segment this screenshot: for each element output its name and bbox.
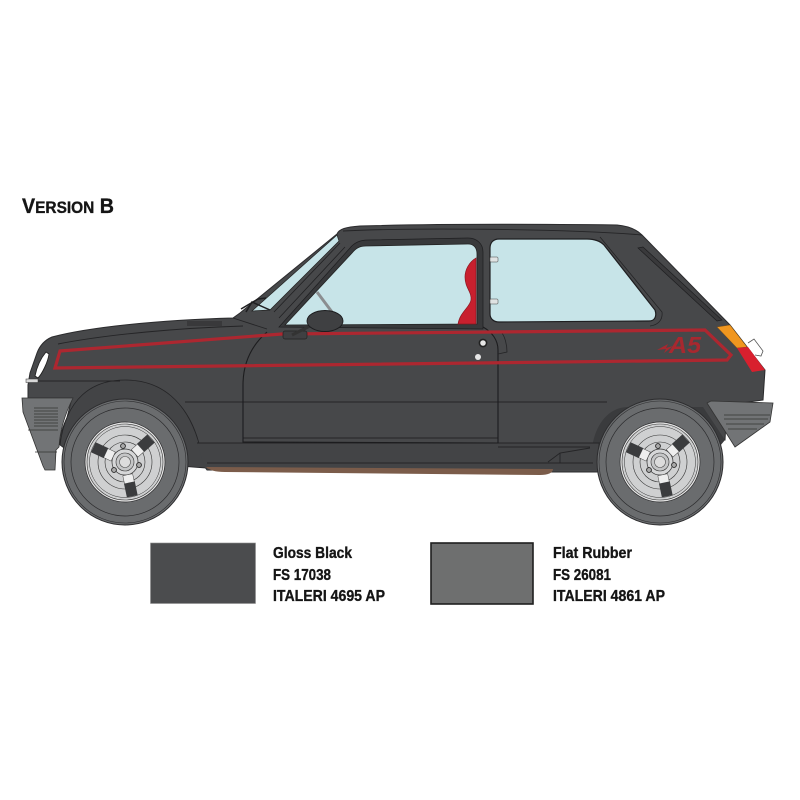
- body panel lines: [28, 229, 642, 463]
- car illustration: [22, 224, 773, 525]
- bonnet vent: [187, 321, 222, 326]
- car body: [28, 224, 765, 472]
- rocker sill: [197, 443, 598, 470]
- tail light amber: [717, 325, 747, 348]
- wiper: [241, 298, 270, 312]
- label: Gloss Black: ITALERI 4695 AP: [273, 588, 385, 605]
- door handle recess: [493, 332, 507, 354]
- door buttons: [475, 339, 487, 360]
- A pillar mirror stalk: [317, 292, 332, 312]
- swatch: Gloss Black: [150, 543, 256, 604]
- front side window glass: [285, 244, 477, 325]
- red side stripe: [55, 330, 731, 368]
- label: Flat Rubber: [553, 545, 665, 605]
- front bumper vents: [28, 408, 58, 452]
- window frame: front: [279, 238, 483, 329]
- heading: Version B: VERSION B: [22, 195, 114, 218]
- front bumper: [22, 398, 73, 470]
- brown underbody strip: [206, 467, 553, 475]
- label: Gloss Black: [273, 545, 385, 605]
- rear window surround: [600, 237, 662, 326]
- A5 logo: A5: [668, 332, 702, 358]
- front wheel arch: [60, 380, 206, 468]
- label: Flat Rubber: Flat Rubber: [553, 545, 632, 562]
- tail light red: [737, 347, 765, 372]
- label: Flat Rubber: FS 26081: [553, 567, 611, 584]
- rear wheel: [597, 399, 723, 525]
- front wheel: [62, 399, 188, 525]
- red seat: [458, 258, 476, 324]
- a-pillar lines: [274, 243, 345, 318]
- rear vent strip: [638, 247, 722, 321]
- windscreen glass: [252, 235, 339, 311]
- rear bracket: [748, 339, 763, 356]
- rear wheel well: [593, 407, 725, 470]
- rear bumper ribs: [724, 415, 770, 429]
- headlight: [35, 352, 49, 378]
- quarter window latches: [490, 257, 498, 304]
- rear window glass: [490, 239, 656, 322]
- rear bumper: [707, 401, 773, 447]
- front marker bar: [26, 379, 38, 382]
- label: Gloss Black: FS 17038: [273, 567, 331, 584]
- label: Gloss Black: Gloss Black: [273, 545, 352, 562]
- A5 logo: [657, 332, 702, 358]
- door outline: [243, 327, 498, 443]
- wing mirror: [283, 310, 343, 339]
- swatch: Flat Rubber: [431, 543, 533, 604]
- label: Flat Rubber: ITALERI 4861 AP: [553, 588, 665, 605]
